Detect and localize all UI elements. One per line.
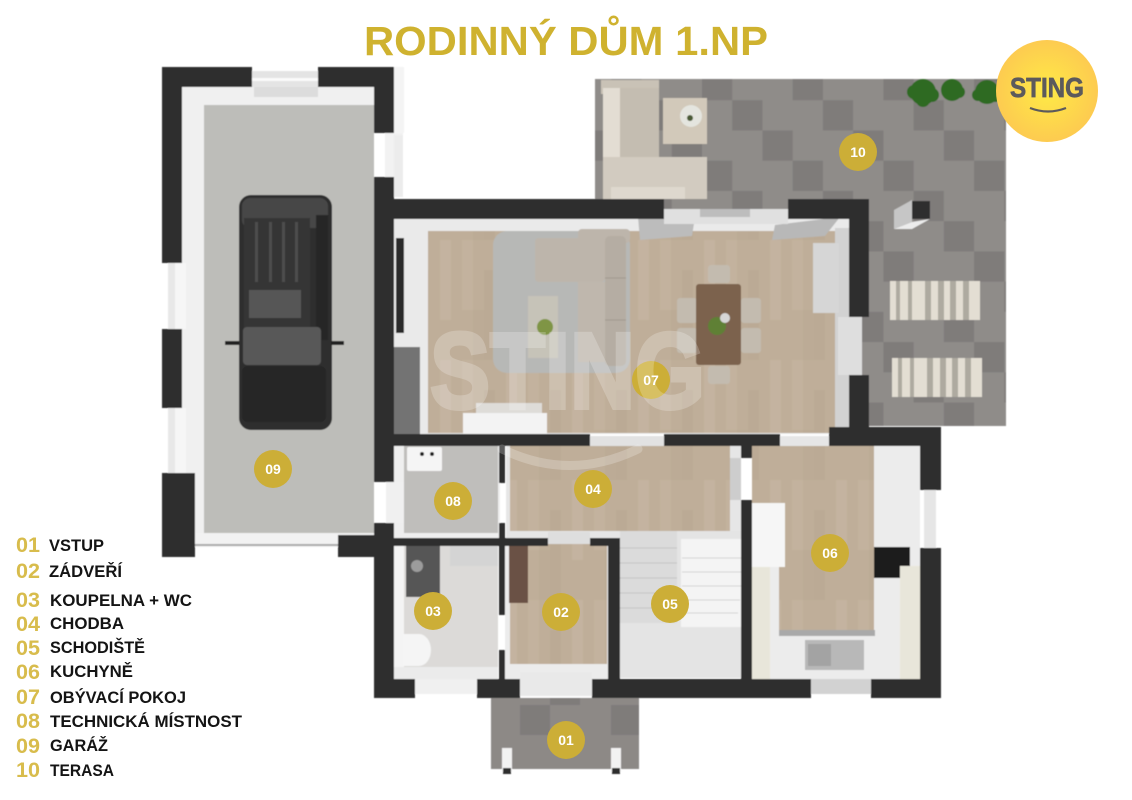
badge 01 (547, 721, 585, 759)
legend item 01 (16, 534, 104, 557)
badge 06 (811, 534, 849, 572)
floor plan (162, 67, 1006, 774)
badge 07 (632, 361, 670, 399)
badge 10 (839, 133, 877, 171)
logo: Sting: STING (1010, 72, 1084, 103)
room 02 vestibule (505, 544, 608, 680)
legend item 08: TECHNICKÁ MÍSTNOST (50, 712, 242, 731)
room 03 bathroom (394, 546, 498, 680)
legend item 02: 02 (16, 560, 40, 583)
small windows and doors (386, 436, 936, 696)
coffee table with plant (528, 296, 558, 358)
legend item 08 (16, 710, 242, 733)
sun lounger 1 (890, 281, 980, 320)
legend item 07 (16, 686, 186, 709)
badge 01: 01 (558, 732, 574, 748)
legend item 10: 10 (16, 759, 40, 782)
living sofa (535, 229, 630, 366)
badge 02 (542, 593, 580, 631)
legend item 09: GARÁŽ (50, 736, 108, 755)
badge 07: 07 (643, 372, 659, 388)
outdoor cube (894, 200, 930, 229)
watermark: STING (430, 310, 705, 431)
legend item 02 (16, 560, 122, 583)
room number badges (254, 133, 877, 759)
title: RODINNÝ DŮM 1.NP (364, 15, 768, 64)
outdoor corner sofa (601, 80, 707, 200)
garage room (182, 87, 375, 547)
badge 05 (651, 585, 689, 623)
legend item 07: 07 (16, 686, 40, 709)
room 08 technical room (394, 446, 500, 538)
garage side window right (385, 67, 404, 197)
rug (493, 231, 630, 373)
sun lounger 2 (892, 358, 982, 397)
badge 06: 06 (822, 545, 838, 561)
legend item 03: KOUPELNA + WC (50, 592, 192, 610)
garage window top (252, 71, 318, 97)
legend item 04 (16, 613, 124, 636)
legend item 05 (16, 637, 145, 660)
hedge plants (907, 79, 1002, 107)
badge 03 (414, 592, 452, 630)
legend item 07: OBÝVACÍ POKOJ (50, 688, 186, 707)
curtains (638, 217, 840, 240)
legend item 02: ZÁDVEŘÍ (49, 562, 122, 581)
legend item 05: 05 (16, 637, 40, 660)
legend item 06 (16, 661, 133, 684)
legend item 05: SCHODIŠTĚ (50, 638, 145, 657)
badge 09: 09 (265, 461, 281, 477)
room 05 staircase (620, 531, 743, 678)
badge 09 (254, 450, 292, 488)
badge 10: 10 (850, 144, 866, 160)
entrance terrace 01 floor (491, 698, 639, 774)
legend item 09: 09 (16, 735, 40, 758)
badge 08 (434, 482, 472, 520)
living room 07 floor (394, 219, 849, 434)
legend item 01: 01 (16, 534, 40, 557)
watermark (430, 310, 705, 466)
legend item 03: 03 (16, 589, 40, 612)
badge 05: 05 (662, 596, 678, 612)
outdoor table with flowers (663, 98, 707, 144)
living room windows (664, 209, 862, 375)
badge 04 (574, 470, 612, 508)
badge 04: 04 (585, 481, 601, 497)
dining table set (677, 265, 761, 384)
legend (16, 534, 242, 782)
legend item 01: VSTUP (49, 537, 104, 555)
terrace 10 floor (595, 79, 1006, 426)
badge 03: 03 (425, 603, 441, 619)
console and marble top (463, 403, 547, 434)
legend item 10: TERASA (50, 762, 114, 780)
legend item 08: 08 (16, 710, 40, 733)
legend item 06: KUCHYNĚ (50, 662, 133, 681)
garage windows left (168, 263, 186, 473)
room 06 kitchen (751, 446, 922, 680)
legend item 09 (16, 735, 108, 758)
walls (162, 67, 941, 698)
legend item 04: CHODBA (50, 615, 124, 633)
legend item 10 (16, 759, 114, 782)
logo: Sting (996, 40, 1098, 142)
legend item 06: 06 (16, 661, 40, 684)
sideboard (813, 243, 839, 313)
legend item 03 (16, 589, 192, 612)
badge 08: 08 (445, 493, 461, 509)
room 04 hallway (506, 446, 741, 542)
car (225, 195, 344, 430)
legend item 04: 04 (16, 613, 40, 636)
badge 02: 02 (553, 604, 569, 620)
